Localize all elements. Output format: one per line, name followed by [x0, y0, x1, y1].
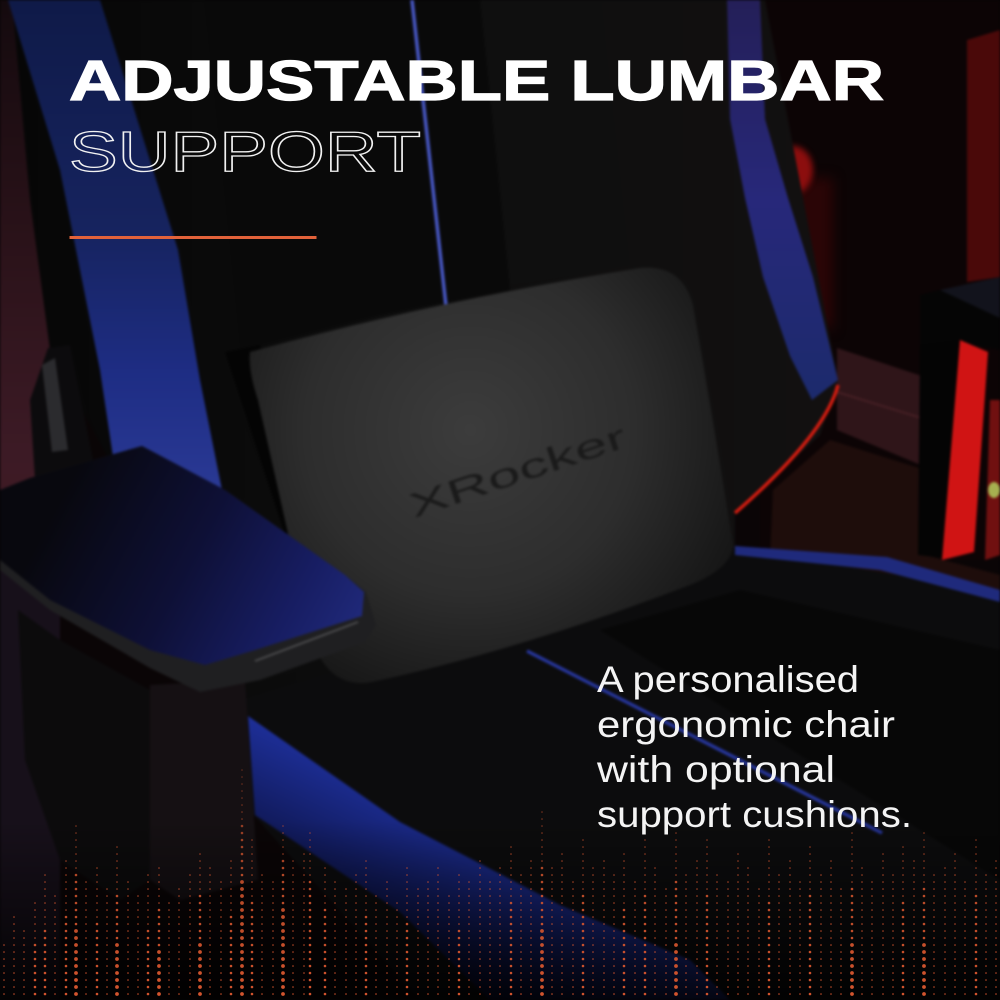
seat right blue stripe	[735, 546, 1000, 602]
halftone dot columns	[4, 770, 996, 1000]
centre piping	[412, 0, 446, 306]
seat	[240, 548, 1000, 1000]
bottom darkening	[0, 820, 1000, 1000]
body text: A personalised	[597, 659, 859, 700]
seat piping	[527, 651, 882, 833]
body text	[596, 659, 912, 835]
title line 2: SUPPORT outlined: SUPPORT	[69, 120, 421, 184]
title line 1: ADJUSTABLE LUMBAR: ADJUSTABLE LUMBAR	[69, 49, 884, 113]
body text: with optional	[596, 749, 835, 790]
right blue wing	[727, 0, 838, 400]
left side panel of chair	[30, 345, 95, 480]
armrest support	[18, 610, 258, 900]
cushion logo: XRocker	[404, 418, 631, 526]
armrest	[0, 446, 376, 692]
body text: support cushions.	[597, 794, 912, 835]
seat fabric shade	[600, 590, 1000, 880]
side panel grey insert	[42, 358, 68, 452]
title	[69, 49, 884, 184]
chair back	[12, 0, 838, 720]
backrest panels	[205, 0, 510, 350]
body text: ergonomic chair	[597, 704, 895, 745]
seat left blue bolster	[248, 716, 730, 1000]
side table with red light	[918, 277, 1000, 560]
lumbar cushion	[225, 268, 733, 683]
red glow on chair edge	[735, 385, 838, 513]
left blue wing	[8, 0, 224, 500]
orange divider	[70, 236, 316, 239]
